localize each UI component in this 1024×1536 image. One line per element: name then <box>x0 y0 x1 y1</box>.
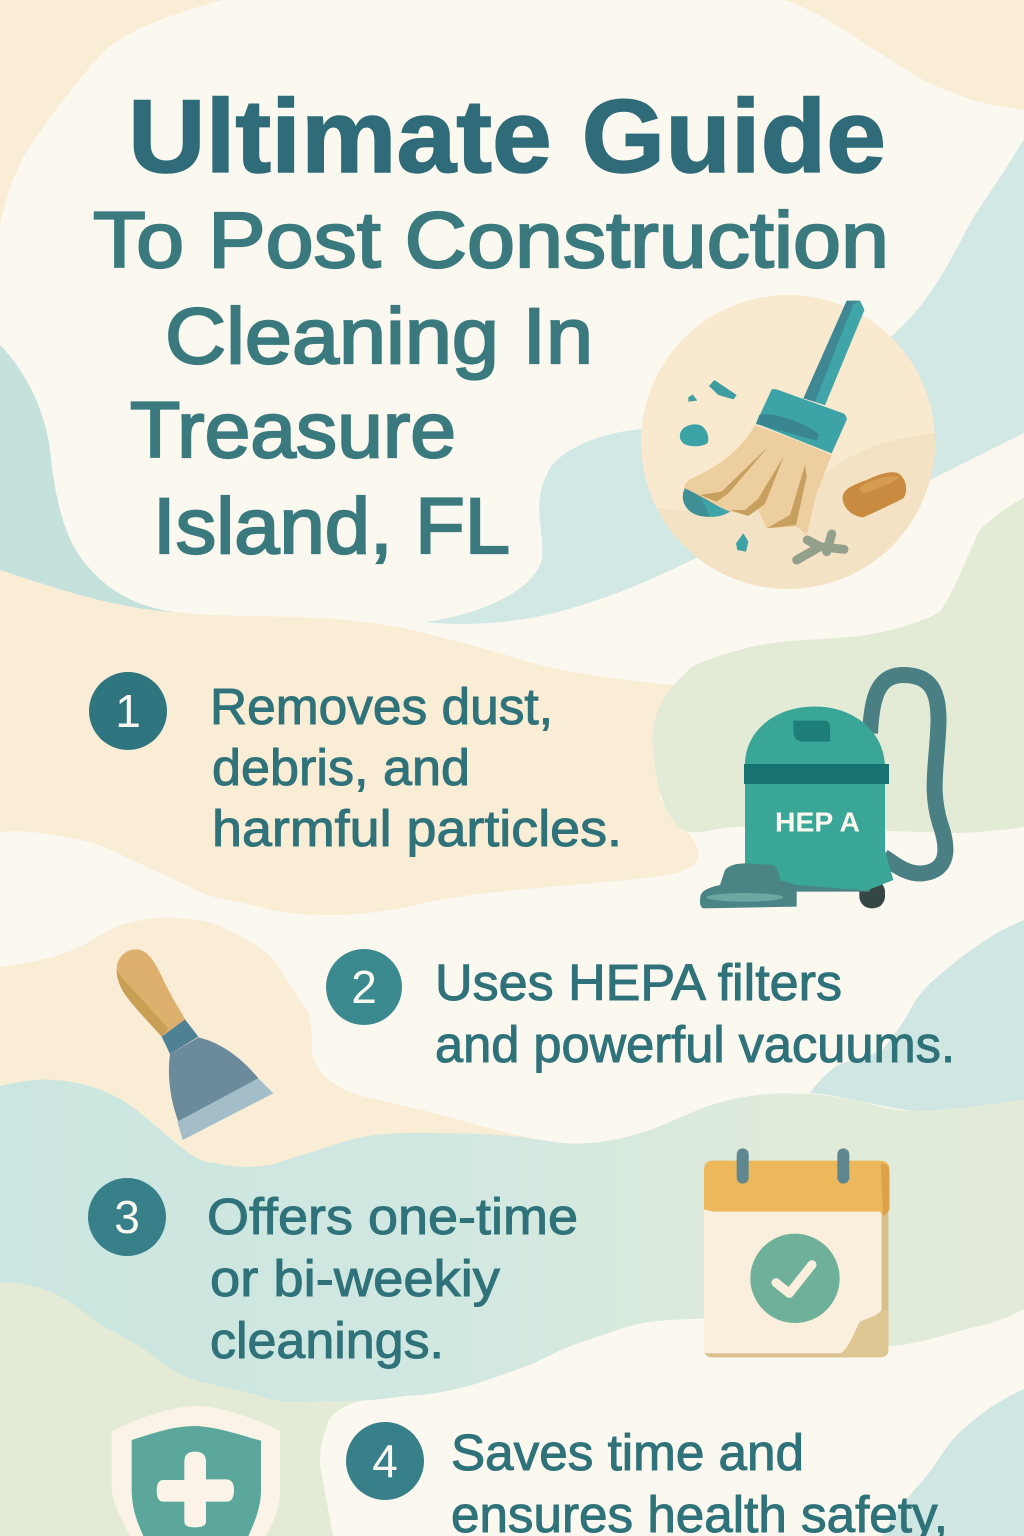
step 4 text: Saves time and <box>451 1424 804 1481</box>
step 3 text: or bi-weekiy <box>210 1250 501 1307</box>
icon: broom sweeping debris <box>640 295 940 600</box>
icon: HEPA vacuum <box>700 675 945 908</box>
number badge 3 <box>88 1178 166 1256</box>
title line: Treasure: Treasure <box>130 385 456 474</box>
step 3 <box>88 1178 578 1369</box>
number badge 2 <box>326 949 402 1025</box>
step 1 text: harmful particles. <box>212 800 622 857</box>
step 3 text: cleanings. <box>210 1312 444 1369</box>
step 1 text: Removes dust, <box>210 678 553 735</box>
title <box>93 79 889 570</box>
step 4 text <box>451 1424 948 1536</box>
step 4 <box>346 1422 948 1536</box>
number badge 4: 4 <box>372 1435 398 1487</box>
step 2 <box>326 949 955 1073</box>
number badge 1: 1 <box>115 685 141 737</box>
title line: Ultimate Guide: Ultimate Guide <box>128 79 886 195</box>
icon: health shield <box>112 1406 280 1536</box>
step 2 text: Uses HEPA filters <box>435 954 842 1011</box>
step 1 text <box>210 678 622 857</box>
step 3 text <box>207 1188 578 1369</box>
step 1 <box>89 672 622 857</box>
title line: Cleaning In: Cleaning In <box>165 291 593 380</box>
step 3 text: Offers one-time <box>207 1188 578 1245</box>
icon: calendar with check <box>704 1148 889 1357</box>
icon: HEPA vacuum: HEP A <box>775 807 860 838</box>
step 2 text: and powerful vacuums. <box>435 1016 955 1073</box>
number badge 2: 2 <box>351 961 377 1013</box>
number badge 1 <box>89 672 167 750</box>
title line: Island, FL: Island, FL <box>153 481 510 570</box>
number badge 4 <box>346 1422 424 1500</box>
step 2 text <box>435 954 955 1073</box>
number badge 3: 3 <box>114 1191 140 1243</box>
icon: scraper <box>117 949 273 1140</box>
title line: To Post Construction: To Post Construction <box>93 195 889 284</box>
step 1 text: debris, and <box>212 739 470 796</box>
